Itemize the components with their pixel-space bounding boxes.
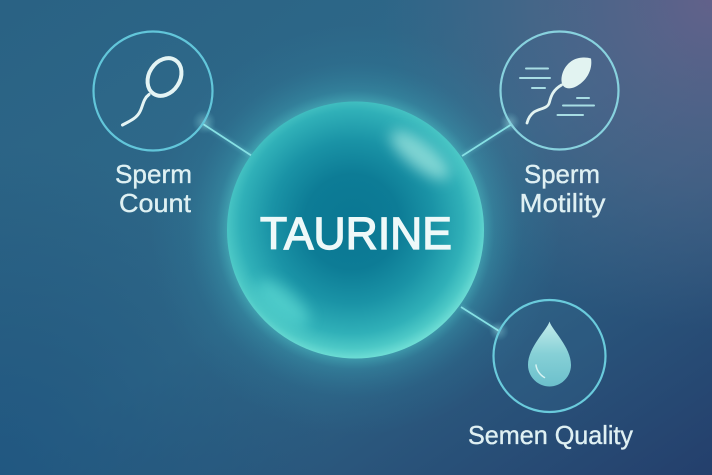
label: Motility — [520, 188, 606, 218]
highlight: bottom left — [250, 272, 316, 334]
connector: semen quality — [461, 307, 509, 341]
connector: sperm motility — [462, 112, 520, 156]
sphere glow — [150, 25, 560, 435]
icon: swimming sperm — [520, 57, 594, 123]
label: Sperm — [524, 159, 600, 189]
central sphere — [227, 102, 484, 358]
label — [115, 159, 192, 218]
node: sperm count — [94, 32, 212, 218]
icon: sperm — [122, 52, 188, 125]
label: Sperm — [115, 159, 192, 189]
ring — [494, 300, 606, 412]
icon: drop — [528, 322, 571, 386]
ring — [94, 32, 212, 150]
ring — [500, 32, 618, 150]
node: sperm motility — [500, 32, 618, 218]
highlight: top right — [384, 123, 456, 187]
label: Semen Quality — [468, 420, 633, 450]
connector: sperm count — [192, 110, 252, 156]
motion lines — [520, 68, 594, 115]
node: semen quality — [468, 300, 633, 450]
label: Count — [119, 188, 192, 218]
title: TAURINE — [260, 208, 452, 259]
label — [520, 159, 606, 218]
